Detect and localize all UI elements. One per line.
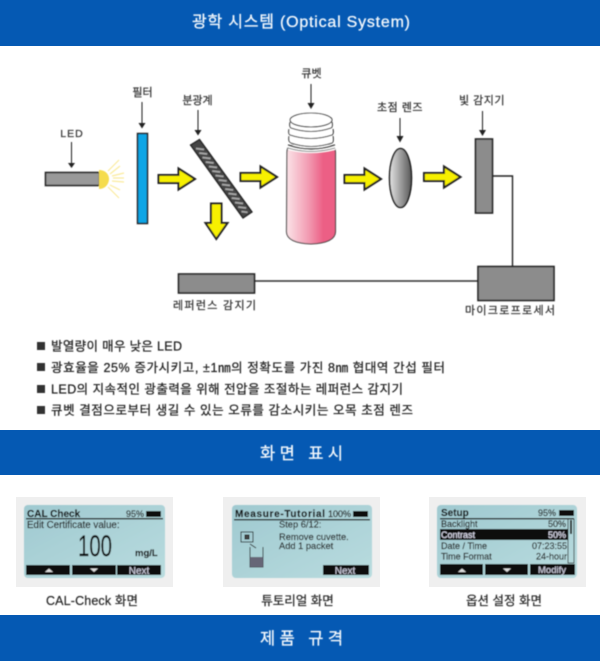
LCD: setup: Time Format — [441, 552, 492, 562]
label: light detector: 빛 감지기 — [459, 94, 505, 107]
connector: detector to microprocessor — [492, 176, 512, 266]
label: filter: 필터 — [132, 86, 153, 99]
LCD: CAL-Check: CAL Check — [27, 509, 81, 520]
diagram: optical system — [46, 67, 555, 317]
LCD: setup: 50% — [548, 530, 566, 540]
heading: specifications: 제품 규격 — [260, 629, 343, 648]
LCD: CAL-Check: Next — [129, 566, 150, 577]
label: light detector — [459, 94, 505, 136]
label: focusing lens — [377, 101, 423, 142]
cuvette — [286, 111, 336, 244]
LCD: setup: 07:23:55 — [532, 541, 567, 551]
connector: reference sensor to microprocessor — [254, 280, 478, 282]
beam splitter — [190, 140, 252, 218]
panel: tutorial screen — [223, 497, 380, 587]
LCD: tutorial: Step 6/12: — [279, 520, 321, 530]
label: microprocessor: 마이크로프로세서 — [465, 304, 555, 317]
feature: concave lens: 큐벳 결점으로부터 생길 수 있는 오류를 감소시키는 오목 초점 렌즈 — [51, 404, 413, 418]
label: LED — [60, 128, 84, 168]
panel: setup screen — [429, 497, 586, 587]
LCD: CAL-Check: 95% — [126, 509, 144, 519]
LCD: tutorial: Measure-Tutorial — [235, 509, 325, 520]
LCD: setup: Modify — [538, 565, 566, 576]
feature: low heat LED: 발열량이 매우 낮은 LED — [51, 340, 182, 354]
LCD: setup: Contrast — [441, 530, 476, 540]
filter bar — [138, 134, 148, 224]
LCD: setup: 95% — [538, 508, 556, 518]
label: reference sensor: 레퍼런스 감지기 — [173, 299, 256, 312]
label: beam splitter — [182, 94, 213, 136]
LCD: CAL-Check: 100 — [78, 530, 112, 563]
LCD: setup: Backlight — [441, 519, 478, 529]
LCD: CAL-Check: mg/L — [135, 548, 158, 559]
icon: cuvette packet — [241, 532, 263, 567]
panel: CAL-Check screen — [16, 497, 173, 587]
label: focusing lens: 초점 렌즈 — [377, 101, 423, 114]
LCD: setup: Setup — [441, 508, 469, 519]
focusing lens — [390, 148, 412, 208]
arrow: LED to splitter — [158, 168, 195, 190]
label: cuvette: 큐벳 — [301, 67, 322, 80]
LCD: tutorial: Add 1 packet — [279, 541, 334, 551]
banner: optical system — [0, 0, 600, 46]
label: LED: LED — [60, 128, 84, 140]
LCD: CAL-Check: Edit Certificate value: — [27, 520, 120, 531]
banner: display — [0, 430, 600, 475]
LCD: tutorial: 100% — [328, 509, 351, 519]
feature: reference sensor: LED의 지속적인 광출력을 위해 전압을 조절하는 레퍼런스 감지기 — [51, 382, 403, 396]
caption: CAL-Check: CAL-Check 화면 — [46, 594, 138, 608]
feature: interference filter: 광효율을 25% 증가시키고, ±1㎚의 정확도를 가진 8㎚ 협대역 간섭 필터 — [51, 361, 445, 375]
LCD: tutorial: Next — [335, 566, 356, 577]
LCD: CAL-Check — [24, 505, 165, 578]
microprocessor — [478, 266, 554, 300]
icon: LED glow — [99, 160, 124, 198]
arrow: splitter down to reference sensor — [206, 204, 228, 239]
LCD: setup: 50% — [548, 519, 566, 529]
LCD: setup: Date / Time — [441, 541, 487, 551]
title: optical system: 광학 시스템 (Optical System) — [192, 13, 410, 31]
arrow: lens to detector — [424, 166, 460, 188]
label: beam splitter: 분광계 — [182, 94, 213, 107]
LCD: tutorial — [232, 505, 372, 578]
caption: tutorial: 튜토리얼 화면 — [261, 594, 334, 608]
LED body — [46, 172, 100, 186]
caption: setup: 옵션 설정 화면 — [466, 594, 542, 608]
banner: specifications — [0, 615, 600, 661]
feature list — [37, 340, 445, 418]
arrow: splitter to cuvette — [240, 166, 277, 188]
LCD: setup — [437, 505, 577, 578]
LCD: setup: 24-hour — [536, 552, 567, 562]
light detector — [476, 139, 492, 213]
arrow: cuvette to lens — [344, 168, 381, 190]
label: filter — [132, 86, 153, 128]
LCD: tutorial: Remove cuvette. — [279, 532, 349, 542]
heading: display: 화면 표시 — [260, 444, 343, 463]
reference sensor — [178, 274, 254, 293]
label: cuvette — [301, 67, 322, 109]
